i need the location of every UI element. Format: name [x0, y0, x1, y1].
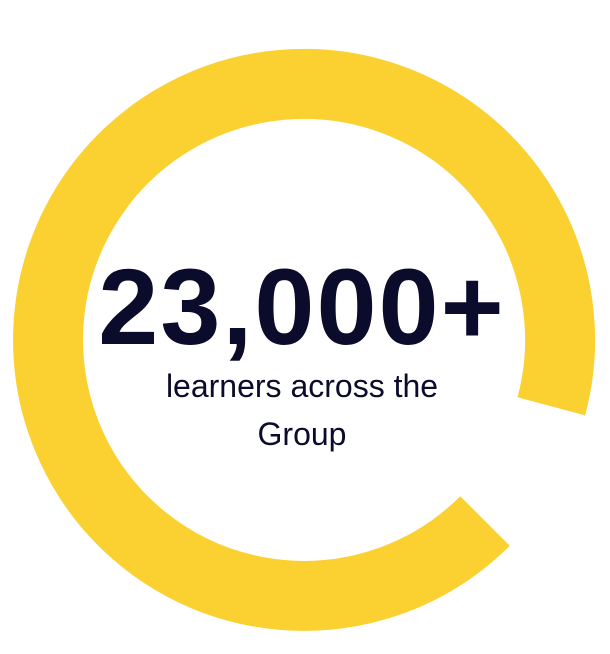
- headline number: 23,000+: [98, 246, 506, 367]
- caption text: [166, 368, 438, 452]
- caption text: learners across the: [166, 368, 438, 404]
- caption text: Group: [258, 416, 346, 452]
